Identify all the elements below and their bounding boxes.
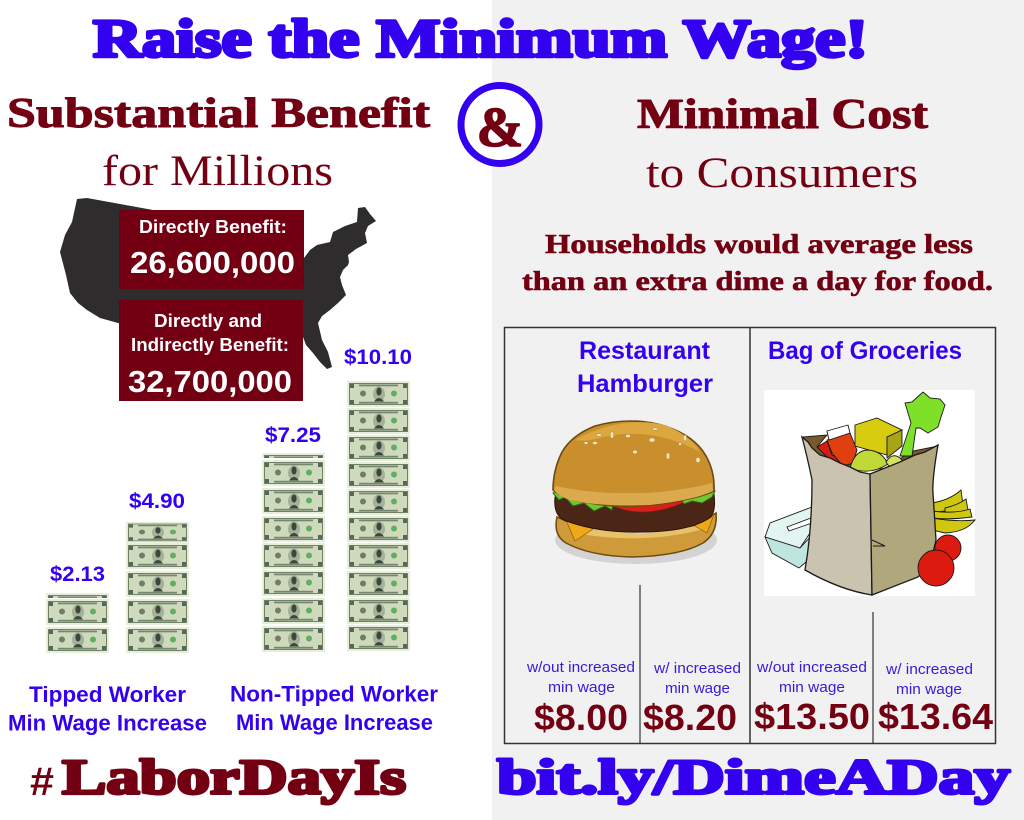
ampersand badge: & (477, 97, 523, 159)
heading line: substantial benefit: Substantial Benefit (7, 91, 430, 137)
apples (935, 535, 961, 561)
heading: bag of groceries: Bag of Groceries (768, 337, 962, 365)
icon: bag of groceries (764, 390, 975, 596)
right background panel (492, 0, 1024, 820)
price column: groceries with increase: w/ increased (885, 661, 973, 678)
chart label: tipped worker (8, 682, 207, 736)
value label: $2.13 (50, 563, 105, 586)
chart label: non-tipped worker: Non-Tipped Worker (230, 682, 438, 706)
subheading: for millions: for Millions (102, 148, 333, 195)
value label: $10.10 (344, 346, 412, 369)
callout: directly benefit: 26,600,000 (130, 245, 295, 280)
heading: substantial benefit (7, 91, 430, 195)
panel: price comparison table (504, 327, 996, 744)
price column: groceries with increase: $13.64 (878, 696, 993, 737)
callout: directly benefit: Directly Benefit: (139, 217, 287, 237)
produce inside bag (803, 392, 945, 471)
price column: hamburger without increase: $8.00 (534, 697, 628, 738)
value label: $4.90 (129, 490, 185, 513)
chart label: tipped worker: Tipped Worker (29, 682, 186, 707)
callout: directly benefit (119, 210, 304, 289)
bill stack (126, 522, 189, 653)
chart label: non-tipped worker: Min Wage Increase (236, 710, 433, 735)
callout: directly and indirectly benefit: Directly and (154, 311, 262, 331)
price column: hamburger with increase (643, 660, 741, 738)
callout: directly and indirectly benefit (119, 300, 303, 401)
price column: hamburger without increase: w/out increased (526, 659, 635, 676)
paper bag (802, 437, 872, 595)
bill stack (262, 453, 325, 652)
price column: hamburger with increase: w/ increased (653, 660, 741, 677)
text block: households statement: Households would average less (545, 229, 973, 259)
price column: hamburger without increase: min wage (548, 679, 615, 696)
callout: directly and indirectly benefit: Indirectly Benefit: (131, 335, 289, 355)
value label: $7.25 (265, 424, 321, 447)
heading: restaurant hamburger: Hamburger (577, 370, 713, 398)
price column: hamburger without increase (526, 659, 635, 738)
bar: tipped increased wage in dollar bills (126, 490, 189, 653)
price column: groceries without increase: $13.50 (754, 696, 870, 737)
ampersand badge (461, 86, 539, 164)
heading: restaurant hamburger: Restaurant (579, 337, 711, 365)
link: bit.ly/DimeADay: bit.ly/DimeADay (497, 748, 1010, 804)
subheading: to consumers: to Consumers (646, 150, 918, 197)
chart label: non-tipped worker (230, 682, 438, 735)
text block: households statement: than an extra dime a day for food. (522, 266, 993, 296)
price column: groceries with increase: min wage (896, 681, 962, 698)
icon: hamburger (553, 421, 717, 564)
hashtag: labor day is (30, 748, 406, 804)
bill stack (46, 593, 109, 653)
hashtag: labor day is: LaborDayIs (62, 748, 406, 804)
map of the United States (60, 198, 376, 369)
bill stack (347, 381, 410, 651)
price column: hamburger with increase: $8.20 (643, 697, 737, 738)
bananas (932, 490, 975, 533)
price column: groceries without increase (754, 659, 870, 737)
price column: groceries without increase: w/out increased (756, 659, 867, 676)
bar: non-tipped current wage in dollar bills (262, 424, 325, 652)
title: Raise the Minimum Wage! (93, 8, 868, 68)
chart label: tipped worker: Min Wage Increase (8, 710, 207, 736)
price column: groceries without increase: min wage (779, 679, 845, 696)
price column: groceries with increase (878, 661, 993, 737)
callout: directly and indirectly benefit: 32,700,000 (128, 364, 292, 399)
heading line: minimal cost: Minimal Cost (637, 92, 928, 138)
heading: restaurant hamburger (577, 337, 713, 398)
heading: minimal cost (637, 92, 928, 197)
bar: non-tipped increased wage in dollar bills (344, 346, 412, 651)
hashtag: labor day is: # (30, 760, 54, 804)
food container (765, 507, 812, 568)
text block: households statement (522, 229, 993, 296)
price column: hamburger with increase: min wage (665, 680, 730, 697)
bar: tipped current wage in dollar bills (46, 563, 109, 653)
